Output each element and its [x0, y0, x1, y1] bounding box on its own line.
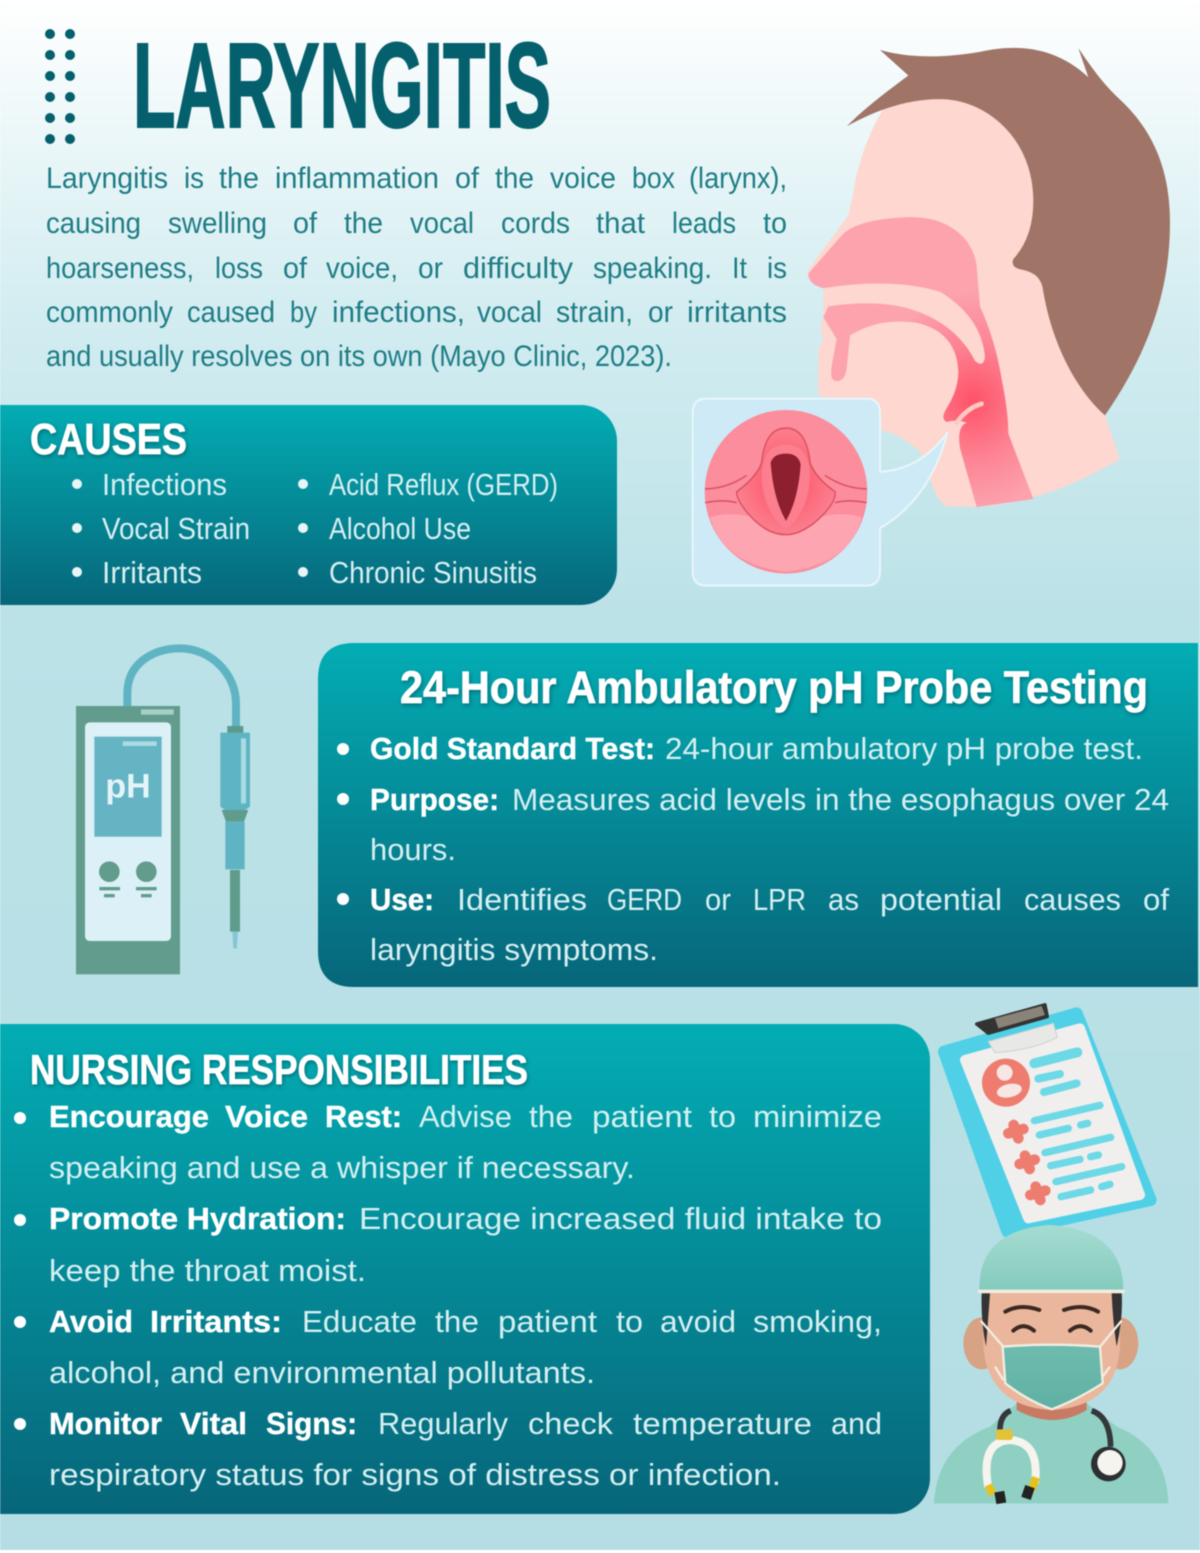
- mask: [981, 1321, 1122, 1409]
- illustration: nurse: [934, 1225, 1168, 1503]
- nursing bullets: Signs:: [266, 1406, 357, 1441]
- nursing bullets: Encourage increased fluid intake to: [359, 1201, 882, 1236]
- nursing bullets: Encourage: [49, 1099, 209, 1134]
- intro text block: inflammation: [275, 162, 439, 195]
- intro text block: difficulty: [463, 252, 573, 285]
- nursing bullets: minimize: [753, 1099, 882, 1134]
- intro text block: caused: [187, 296, 275, 329]
- pH bullets: Purpose:: [370, 782, 499, 817]
- pH bullets: hours.: [370, 832, 456, 867]
- nursing bullets: patient: [498, 1304, 597, 1339]
- intro text block: (larynx),: [689, 162, 787, 195]
- red crosses: [1008, 1125, 1045, 1200]
- pH bullets: of: [1143, 882, 1169, 917]
- clip: [977, 1005, 1057, 1053]
- nursing bullets: Voice: [225, 1099, 308, 1134]
- intro text block: of: [293, 207, 318, 240]
- intro text block: infections,: [332, 296, 465, 329]
- intro text block: is: [767, 252, 787, 285]
- nursing bullets: [14, 1099, 882, 1492]
- intro text block: voice,: [326, 252, 398, 285]
- nursing bullets: patient: [592, 1099, 692, 1134]
- hair: [847, 48, 1170, 415]
- intro text block: hoarseness,: [46, 252, 194, 285]
- body: [934, 1403, 1168, 1503]
- intro text block: the: [344, 207, 383, 240]
- nursing bullets: Monitor: [49, 1406, 162, 1441]
- intro text block: the: [495, 162, 534, 195]
- illustration: head profile with throat: [693, 48, 1170, 586]
- intro text block: of: [455, 162, 480, 195]
- causes heading: CAUSES: [30, 415, 187, 464]
- intro text block: cords: [501, 207, 570, 240]
- intro text block: to: [763, 207, 787, 240]
- intro text block: loss: [215, 252, 263, 285]
- panel: nursing responsibilities: [0, 1024, 930, 1514]
- nursing bullets: Rest:: [325, 1099, 402, 1134]
- intro text block: or: [418, 252, 443, 285]
- nursing bullets: alcohol, and environmental pollutants.: [49, 1355, 595, 1390]
- meter display: pH: [105, 767, 151, 805]
- nursing bullets: the: [529, 1099, 573, 1134]
- intro text block: voice: [550, 162, 616, 195]
- intro text block: causing: [46, 207, 141, 240]
- nursing bullets: Educate: [302, 1304, 417, 1339]
- pH bullets: Measures acid levels in the esophagus over 24: [512, 782, 1169, 817]
- causes list: [72, 467, 558, 590]
- nursing bullets: to: [616, 1304, 643, 1339]
- panel: causes: [0, 405, 617, 605]
- pH heading: 24-Hour Ambulatory pH Probe Testing: [400, 662, 1148, 713]
- decorative dots: [45, 29, 75, 144]
- nursing bullets: Regularly: [378, 1406, 508, 1441]
- intro text block: [46, 162, 787, 373]
- intro text block: strain,: [556, 296, 633, 329]
- causes list: Acid Reflux (GERD): [329, 467, 558, 502]
- intro text block: and usually resolves on its own (Mayo Clinic, 2023).: [46, 340, 672, 373]
- causes list: Alcohol Use: [329, 511, 471, 546]
- nursing bullets: Avoid: [49, 1304, 133, 1339]
- airway: [808, 217, 1033, 507]
- pH bullets: Identifies: [457, 882, 587, 917]
- intro text block: or: [648, 296, 673, 329]
- intro text block: It: [732, 252, 748, 285]
- meter buttons: [99, 861, 157, 897]
- probe cable: [127, 648, 236, 728]
- title: LARYNGITIS: [133, 17, 551, 153]
- nursing bullets: check: [528, 1406, 614, 1441]
- nursing bullets: respiratory status for signs of distress or infection.: [49, 1457, 781, 1492]
- nursing bullets: the: [435, 1304, 479, 1339]
- nursing bullets: keep the throat moist.: [49, 1253, 366, 1288]
- face: [983, 1290, 1120, 1410]
- intro text block: box: [632, 162, 675, 195]
- nursing bullets: and: [831, 1406, 882, 1441]
- pH bullets: Use:: [370, 882, 434, 917]
- epiglottis: [957, 404, 982, 423]
- patient badge: [982, 1059, 1030, 1107]
- nursing bullets: Irritants:: [150, 1304, 282, 1339]
- meter body: [76, 706, 180, 974]
- intro text block: is: [184, 162, 204, 195]
- nursing bullets: Vital: [180, 1406, 247, 1441]
- pH bullets: potential: [880, 882, 1002, 917]
- inset bubble: [693, 399, 947, 586]
- intro text block: by: [290, 296, 317, 329]
- intro text block: swelling: [168, 207, 267, 240]
- pH bullets: or: [705, 882, 731, 917]
- nursing bullets: avoid: [660, 1304, 736, 1339]
- intro text block: vocal: [410, 207, 474, 240]
- pH bullets: 24-hour ambulatory pH probe test.: [665, 731, 1143, 766]
- intro text block: the: [219, 162, 259, 195]
- causes list: Infections: [102, 467, 227, 502]
- intro text block: speaking.: [593, 252, 712, 285]
- head skin: [807, 94, 1120, 507]
- intro text block: that: [596, 207, 646, 240]
- causes list: Vocal Strain: [102, 511, 250, 546]
- vocal cords view: [705, 410, 867, 574]
- intro text block: irritants: [687, 296, 787, 329]
- illustration: clipboard: [944, 1005, 1151, 1232]
- clipboard sheet: [965, 1028, 1140, 1218]
- pH bullets: causes: [1024, 882, 1121, 917]
- intro text block: commonly: [46, 296, 173, 329]
- nursing heading: NURSING RESPONSIBILITIES: [30, 1046, 528, 1093]
- stethoscope: [987, 1411, 1126, 1503]
- surgical cap: [979, 1225, 1123, 1290]
- pH bullets: Gold Standard Test:: [370, 731, 655, 766]
- pH bullets: as: [828, 882, 859, 917]
- ears: [963, 1317, 1138, 1369]
- neck: [1017, 1397, 1087, 1420]
- intro text block: vocal: [477, 296, 542, 329]
- pH bullets: laryngitis symptoms.: [370, 932, 658, 967]
- nursing bullets: Advise: [419, 1099, 512, 1134]
- nursing bullets: smoking,: [753, 1304, 882, 1339]
- intro text block: leads: [672, 207, 736, 240]
- clipboard board: [944, 1013, 1151, 1232]
- pH bullets: LPR: [753, 882, 806, 917]
- panel: pH probe testing: [318, 643, 1198, 987]
- pH bullets: GERD: [607, 882, 682, 917]
- pH bullets: [337, 731, 1169, 967]
- nursing bullets: Promote Hydration:: [49, 1201, 346, 1236]
- causes list: Irritants: [102, 555, 202, 590]
- illustration: pH meter: [76, 648, 250, 974]
- nursing bullets: temperature: [633, 1406, 812, 1441]
- nursing bullets: speaking and use a whisper if necessary.: [49, 1150, 635, 1185]
- intro text block: Laryngitis: [46, 162, 168, 195]
- record lines: [1034, 1052, 1122, 1197]
- intro text block: of: [283, 252, 308, 285]
- nursing bullets: to: [709, 1099, 736, 1134]
- causes list: Chronic Sinusitis: [329, 555, 537, 590]
- meter display: [94, 737, 162, 837]
- eyes and brows: [1005, 1307, 1098, 1331]
